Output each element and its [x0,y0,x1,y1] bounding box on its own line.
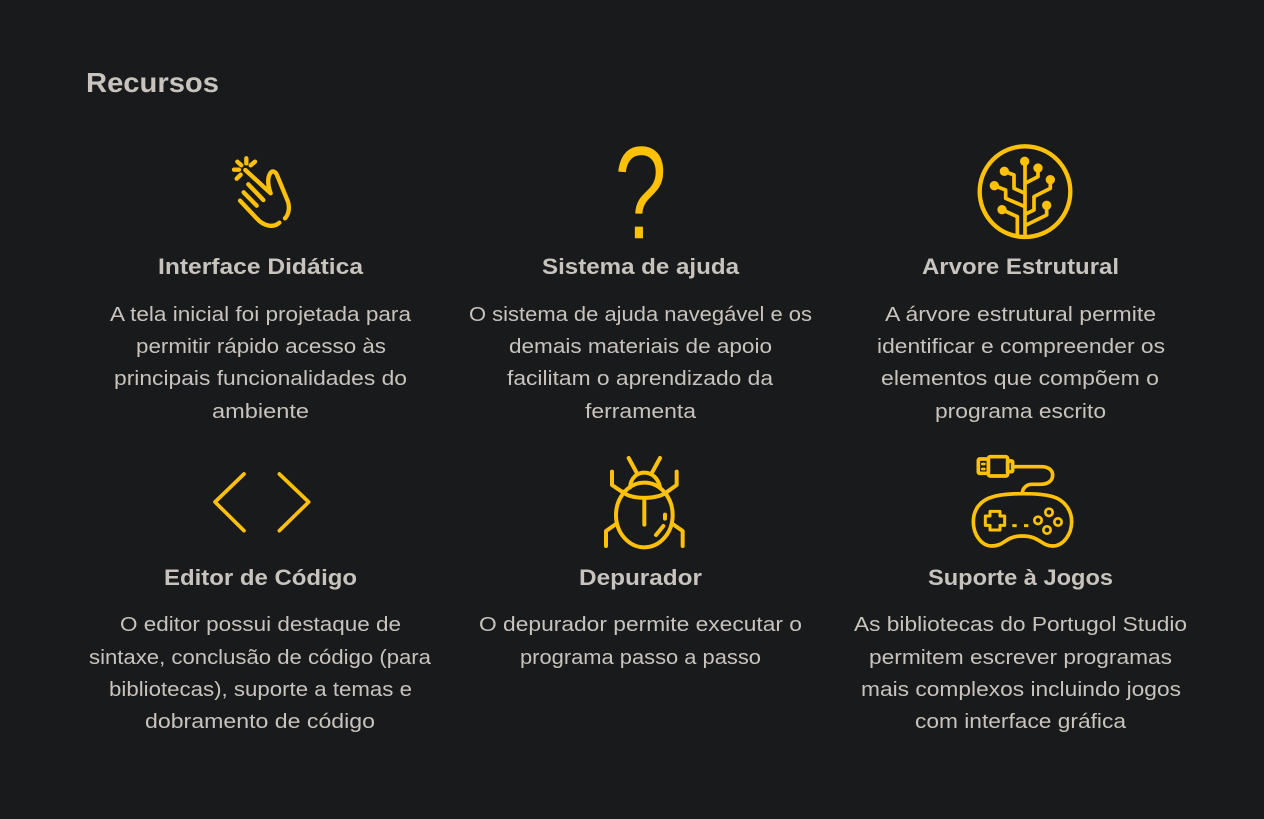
heading: Depurador [579,565,702,590]
panel: Interface Didática [110,158,412,423]
text block [469,304,812,423]
text block: permitir rápido acesso às [136,336,386,358]
text block: As bibliotecas do Portugol Studio [854,614,1187,636]
icon: tapping hand [234,158,289,226]
icon: game controller with usb cable [973,457,1072,546]
text block: O depurador permite executar o [479,614,802,636]
text block: facilitam o aprendizado da [507,368,774,390]
text block: dobramento de código [145,711,375,733]
title: Recursos [86,67,219,98]
text block: ambiente [212,401,309,423]
text block: bibliotecas), suporte a temas e [109,679,412,701]
text block: com interface gráfica [915,711,1127,733]
text block: principais funcionalidades do [114,368,407,390]
text block: O editor possui destaque de [120,614,401,636]
panel: Sistema de ajuda [469,117,812,423]
text block [110,304,412,423]
text block: ferramenta [585,401,697,423]
text block [877,304,1165,423]
heading: Interface Didática [158,254,364,279]
icon: code chevrons [215,474,309,531]
heading: Sistema de ajuda [542,254,740,279]
text block: elementos que compõem o [881,368,1159,390]
panel: Arvore Estrutural [877,146,1165,423]
text block: A árvore estrutural permite [885,304,1156,326]
text block: programa passo a passo [520,647,761,669]
icon: question mark: ? [614,117,667,268]
text block: identificar e compreender os [877,336,1165,358]
text block [479,614,802,669]
heading: Suporte à Jogos [928,565,1113,590]
panel: Depurador [479,458,802,669]
text block: permitem escrever programas [869,647,1172,669]
text block: A tela inicial foi projetada para [110,304,412,326]
panel: Suporte à Jogos [854,457,1187,733]
text block [854,614,1187,733]
heading: Editor de Código [164,565,357,590]
heading: Arvore Estrutural [922,254,1119,279]
icon: circuit tree [980,146,1070,237]
text block: O sistema de ajuda navegável e os [469,304,812,326]
text block: demais materiais de apoio [509,336,772,358]
panel: Editor de Código [89,474,432,733]
text block: mais complexos incluindo jogos [861,679,1181,701]
text block [89,614,432,733]
text block: sintaxe, conclusão de código (para [89,647,432,669]
icon: bug [606,458,683,547]
text block: programa escrito [935,401,1106,423]
